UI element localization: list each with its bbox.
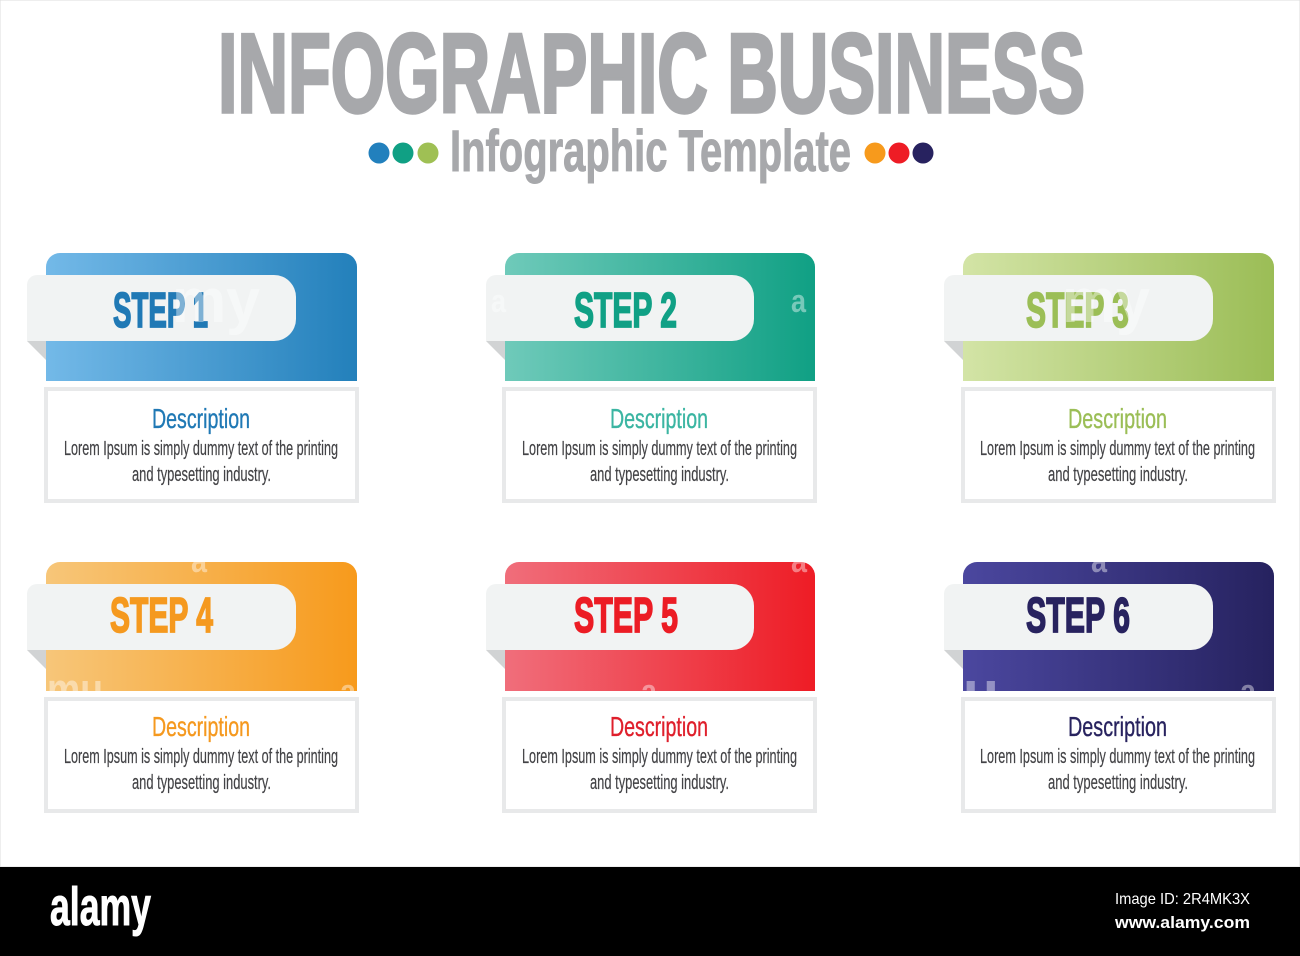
- panel: step 3: and typesetting industry.: [1048, 464, 1188, 486]
- image id text: Image ID: 2R4MK3X: [1115, 891, 1250, 908]
- panel: step 2: STEP 2: [574, 284, 677, 338]
- panel: step 3: Description: [1068, 403, 1167, 434]
- watermark fragments: mu: [47, 665, 103, 714]
- decorative dots left: [368, 142, 438, 164]
- watermark fragments: a: [791, 542, 808, 580]
- panel: step 3: [944, 253, 1274, 501]
- watermark fragments: a: [641, 673, 658, 711]
- watermark fragments: u: [963, 665, 999, 714]
- watermark fragments: my: [1062, 267, 1151, 336]
- panel: step 2: and typesetting industry.: [590, 464, 729, 486]
- panel: step 6: STEP 6: [1026, 589, 1130, 643]
- decorative dots right: [864, 142, 934, 164]
- panel: step 2: [486, 253, 815, 501]
- watermark fragments: a: [791, 283, 806, 319]
- watermark fragments: a: [491, 283, 506, 319]
- panel: step 5: [486, 562, 815, 811]
- subtitle: Infographic Template: [450, 119, 851, 184]
- footer logo: alamy: [50, 877, 151, 937]
- panel: step 6: and typesetting industry.: [1048, 772, 1188, 794]
- panel: step 4: STEP 4: [110, 589, 213, 643]
- panel: step 5: and typesetting industry.: [590, 772, 729, 794]
- website text: www.alamy.com: [1114, 913, 1250, 932]
- panel: step 6: Description: [1068, 711, 1167, 742]
- panel: step 5: Lorem Ipsum is simply dummy text of the printing: [522, 746, 797, 768]
- panel: step 3: STEP 3: [1026, 284, 1129, 338]
- watermark fragments: a: [1091, 542, 1108, 580]
- panel: step 6: [944, 562, 1274, 811]
- watermark fragments: my: [172, 267, 261, 336]
- panel: step 1: STEP 1: [113, 284, 208, 338]
- watermark fragments: a: [191, 542, 208, 580]
- watermark fragments: [50, 292, 1254, 691]
- panel: step 1: [27, 253, 357, 501]
- panel: step 5: Description: [610, 711, 708, 742]
- panel: step 4: Lorem Ipsum is simply dummy text of the printing: [64, 746, 338, 768]
- panel: step 2: Description: [610, 403, 708, 434]
- panel: step 4: and typesetting industry.: [132, 772, 271, 794]
- panel: step 4: Description: [152, 711, 250, 742]
- watermark fragments: a: [340, 673, 357, 711]
- panel: step 4: [27, 562, 357, 811]
- panel: step 1: and typesetting industry.: [132, 464, 271, 486]
- panel: step 5: STEP 5: [574, 589, 678, 643]
- footer bar: [0, 867, 1300, 956]
- panel: step 1: Lorem Ipsum is simply dummy text of the printing: [64, 438, 338, 460]
- watermark fragments: a: [1240, 673, 1257, 711]
- panel: step 1: Description: [152, 403, 250, 434]
- panel: step 2: Lorem Ipsum is simply dummy text of the printing: [522, 438, 797, 460]
